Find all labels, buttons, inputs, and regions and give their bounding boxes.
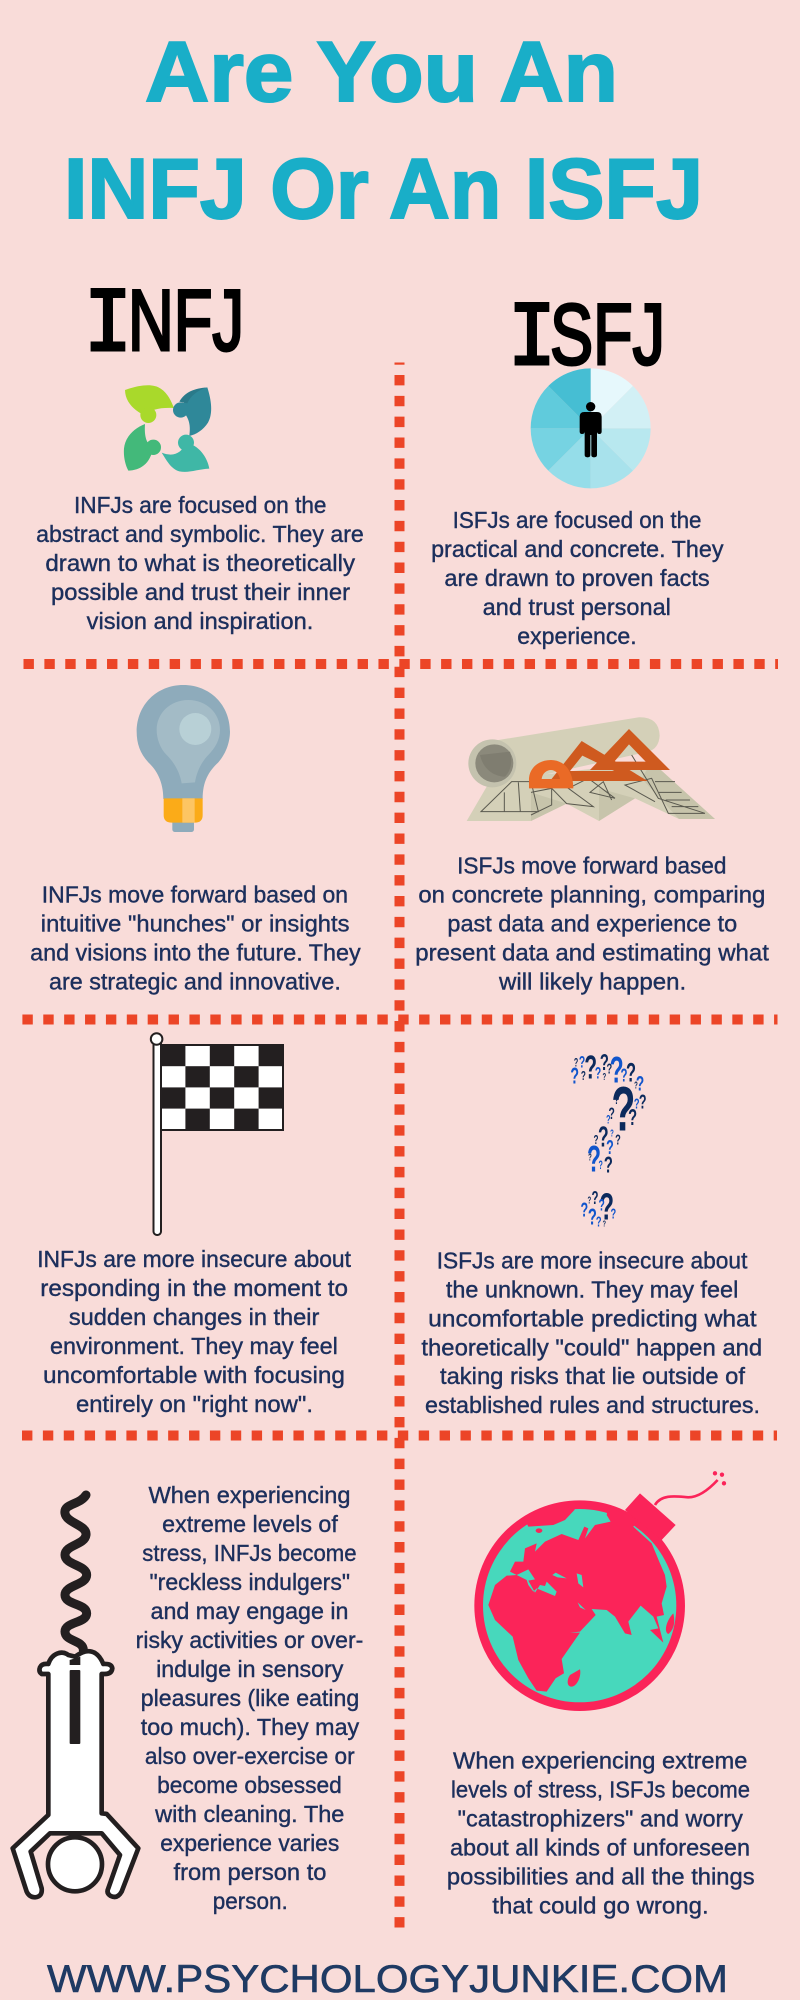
text: INFJ insecurity: responding in the moment to: [40, 1275, 348, 1301]
heading: INFJ: NFJ: [128, 273, 244, 369]
text: ISFJ focus: ISFJs are focused on the: [453, 507, 702, 533]
icon: question mark made of question marks: ?: [628, 1104, 637, 1130]
text: ISFJ moving forward: on concrete planning, comparing: [418, 881, 765, 907]
text: INFJ insecurity: INFJs are more insecure about: [37, 1246, 352, 1272]
text: ISFJ insecurity: ISFJs are more insecure about: [437, 1248, 748, 1274]
icon: question mark made of question marks: ?: [600, 1049, 609, 1075]
icon: question mark made of question marks: ?: [588, 1153, 592, 1164]
text: ISFJ stress: "catastrophizers" and worry: [458, 1806, 743, 1832]
icon: question mark made of question marks: ?: [611, 1075, 635, 1145]
heading: ISFJ: [508, 287, 665, 392]
text: ISFJ insecurity: taking risks that lie outside of: [440, 1363, 746, 1389]
text: INFJ focus: INFJs are focused on the: [74, 492, 326, 518]
icon: blueprint and set squares: [467, 717, 715, 821]
text: INFJ stress: with cleaning. The: [154, 1801, 344, 1827]
icon: question mark made of question marks: ?: [580, 1200, 588, 1222]
heading: ISFJ: I: [508, 287, 556, 392]
text: ISFJ stress: levels of stress, ISFJs become: [451, 1776, 750, 1802]
text: ISFJ focus: practical and concrete. They: [431, 536, 724, 562]
text: INFJ stress: [136, 1482, 363, 1914]
text: INFJ stress: person.: [213, 1888, 288, 1914]
text: ISFJ moving forward: past data and experience to: [447, 910, 737, 936]
text: ISFJ focus: [431, 507, 724, 649]
icon: question mark made of question marks: ?: [620, 1065, 627, 1086]
icon: claw with spring: [13, 1495, 138, 1897]
text: INFJ stress: too much). They may: [141, 1714, 360, 1740]
icon: question mark made of question marks: ?: [610, 1129, 614, 1140]
text: ISFJ insecurity: the unknown. They may feel: [446, 1276, 738, 1302]
text: INFJ insecurity: environment. They may feel: [50, 1333, 338, 1359]
heading: INFJ: [84, 273, 244, 378]
text: INFJ stress: indulge in sensory: [156, 1656, 344, 1682]
icon: question mark made of question marks: ?: [603, 1219, 606, 1229]
text: INFJ insecurity: uncomfortable with focusing: [43, 1362, 345, 1388]
text: ISFJ insecurity: theoretically "could" happen and: [421, 1334, 762, 1360]
text: ISFJ stress: possibilities and all the things: [447, 1864, 755, 1890]
title: INFJ Or An ISFJ: [64, 142, 703, 237]
text: INFJ stress: become obsessed: [157, 1772, 342, 1798]
text: INFJ moving forward: intuitive "hunches" or insights: [41, 910, 350, 936]
title: [64, 25, 703, 237]
icon: question mark made of question marks: ?: [587, 1138, 601, 1179]
icon: globe bomb: [474, 1471, 726, 1711]
text: INFJ stress: from person to: [174, 1859, 326, 1885]
icon: question mark made of question marks: ?: [606, 1113, 610, 1126]
text: INFJ stress: risky activities or over-: [136, 1627, 363, 1653]
icon: question mark made of question marks: ?: [610, 1205, 616, 1222]
icon: question mark made of question marks: ?: [639, 1091, 646, 1113]
icon: question mark made of question marks: ?: [614, 1092, 619, 1107]
text: ISFJ insecurity: established rules and structures.: [425, 1392, 760, 1418]
text: INFJ stress: stress, INFJs become: [142, 1540, 357, 1566]
icon: question mark made of question marks: ?: [626, 1058, 636, 1088]
icon: four leaf people: [124, 385, 211, 472]
text: ISFJ focus: experience.: [517, 623, 637, 649]
icon: question mark made of question marks: ?: [596, 1214, 601, 1231]
text: ISFJ stress: that could go wrong.: [492, 1892, 709, 1918]
heading: ISFJ: SFJ: [550, 287, 665, 383]
text: INFJ stress: "reckless indulgers": [150, 1569, 350, 1595]
text: INFJ focus: [36, 492, 364, 634]
text: INFJ stress: When experiencing: [148, 1482, 350, 1508]
text: INFJ insecurity: entirely on "right now".: [76, 1391, 313, 1417]
icon: question mark made of question marks: ?: [606, 1137, 614, 1159]
icon: question mark made of question marks: ?: [574, 1057, 578, 1070]
text: INFJ stress: extreme levels of: [162, 1511, 338, 1537]
icon: question mark made of question marks: ?: [634, 1095, 639, 1112]
title: Are You An: [145, 25, 618, 120]
text: INFJ stress: pleasures (like eating: [141, 1685, 359, 1711]
text: ISFJ insecurity: uncomfortable predicting what: [428, 1306, 757, 1332]
heading: INFJ: I: [84, 273, 132, 378]
text: ISFJ insecurity: [421, 1248, 762, 1418]
icon: question mark made of question marks: ?: [570, 1062, 579, 1088]
text: INFJ moving forward: and visions into the future. They: [30, 939, 361, 965]
icon: question mark made of question marks: ?: [602, 1072, 606, 1083]
icon: question mark made of question marks: ?: [598, 1196, 605, 1215]
footer website: WWW.PSYCHOLOGYJUNKIE.COM: [47, 1958, 728, 2000]
icon: question mark made of question marks: ?: [615, 1132, 621, 1149]
icon: question mark made of question marks: ?: [604, 1152, 613, 1178]
icon: question mark made of question marks: ?: [610, 1050, 624, 1091]
text: INFJ focus: possible and trust their inner: [51, 579, 350, 605]
icon: question mark made of question marks: ?: [588, 1204, 597, 1230]
text: INFJ focus: drawn to what is theoretically: [45, 550, 356, 576]
icon: question mark made of question marks: [570, 1049, 646, 1231]
text: INFJ focus: vision and inspiration.: [87, 608, 313, 634]
text: INFJ insecurity: [37, 1246, 352, 1417]
icon: question mark made of question marks: ?: [593, 1132, 598, 1147]
text: INFJ stress: also over-exercise or: [145, 1743, 355, 1769]
icon: person in circle: [531, 368, 651, 488]
text: ISFJ stress: about all kinds of unforeseen: [450, 1834, 750, 1860]
text: INFJ insecurity: sudden changes in their: [69, 1304, 320, 1330]
icon: question mark made of question marks: ?: [581, 1068, 586, 1083]
icon: question mark made of question marks: ?: [591, 1187, 598, 1208]
icon: question mark made of question marks: ?: [584, 1049, 597, 1086]
icon: question mark made of question marks: ?: [579, 1052, 585, 1071]
text: ISFJ stress: [447, 1748, 755, 1918]
icon: question mark made of question marks: ?: [634, 1080, 638, 1091]
icon: question mark made of question marks: ?: [598, 1159, 603, 1172]
text: INFJ moving forward: INFJs move forward based on: [42, 881, 348, 907]
text: INFJ moving forward: [30, 881, 361, 994]
icon: question mark made of question marks: ?: [598, 1122, 609, 1154]
icon: checkered flag: [151, 1033, 283, 1235]
icon: question mark made of question marks: ?: [606, 1060, 612, 1077]
text: INFJ moving forward: are strategic and innovative.: [49, 968, 341, 994]
text: ISFJ focus: are drawn to proven facts: [444, 565, 710, 591]
icon: light bulb: [137, 685, 230, 832]
text: ISFJ moving forward: [415, 852, 770, 994]
text: ISFJ moving forward: present data and estimating what: [415, 939, 770, 965]
text: ISFJ focus: and trust personal: [483, 594, 671, 620]
icon: question mark made of question marks: ?: [587, 1195, 591, 1206]
text: INFJ stress: and may engage in: [150, 1598, 348, 1624]
icon: question mark made of question marks: ?: [608, 1104, 615, 1123]
text: ISFJ moving forward: will likely happen.: [498, 968, 686, 994]
text: INFJ stress: experience varies: [160, 1830, 339, 1856]
text: ISFJ moving forward: ISFJs move forward based: [457, 852, 726, 878]
icon: question mark made of question marks: ?: [599, 1185, 614, 1228]
icon: question mark made of question marks: ?: [595, 1063, 601, 1082]
icon: question mark made of question marks: ?: [636, 1071, 644, 1096]
text: INFJ focus: abstract and symbolic. They are: [36, 521, 364, 547]
text: ISFJ stress: When experiencing extreme: [453, 1748, 747, 1774]
